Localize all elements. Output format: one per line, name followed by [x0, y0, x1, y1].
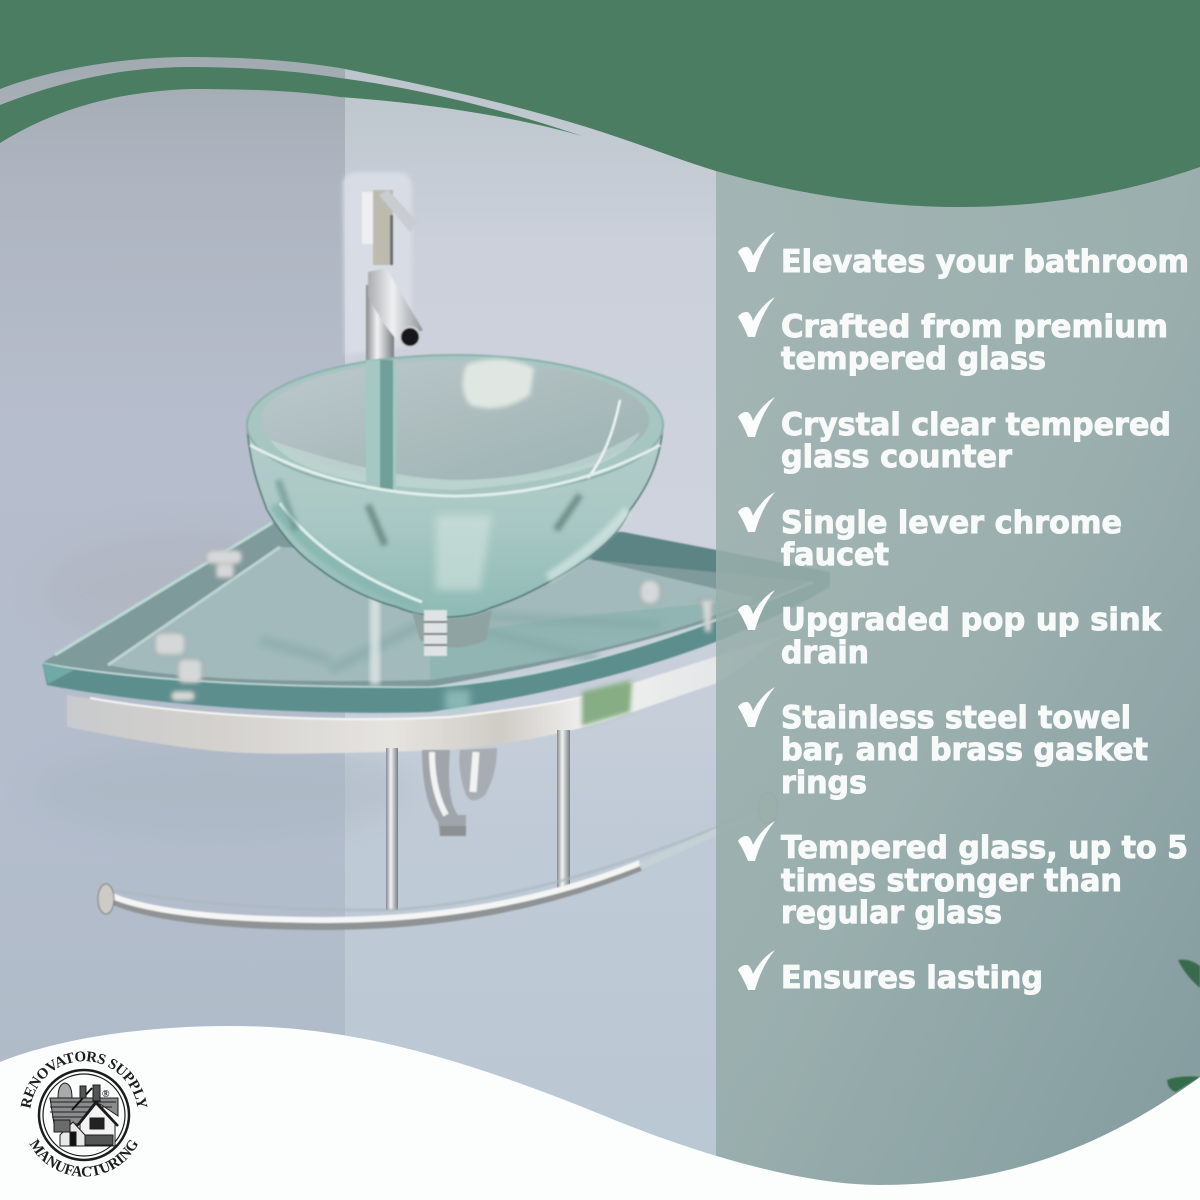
check	[738, 232, 775, 272]
check	[738, 821, 775, 861]
right wall	[345, 0, 1200, 1200]
text: times stronger than	[781, 863, 1122, 899]
text: Elevates your bathroom	[781, 244, 1189, 280]
drain trap	[422, 748, 497, 836]
feature: faucet	[738, 492, 1122, 573]
standoff pins	[155, 550, 717, 701]
towel bar	[98, 793, 780, 925]
logo house	[50, 1083, 118, 1146]
shelf top back band	[42, 523, 830, 687]
text: glass counter	[781, 439, 1013, 475]
feature: elevates	[738, 232, 1189, 280]
text: Crafted from premium	[781, 309, 1168, 345]
registered mark: ®	[102, 1089, 110, 1100]
green wave	[0, 0, 1200, 207]
feature list	[738, 232, 1189, 996]
text: Tempered glass, up to 5	[781, 830, 1188, 866]
text: Crystal clear tempered	[781, 407, 1171, 443]
check	[738, 397, 775, 437]
text: bar, and brass gasket	[781, 732, 1148, 768]
shelf inner surface	[108, 547, 755, 681]
text: Single lever chrome	[781, 505, 1122, 541]
plant leaves	[1167, 960, 1200, 1092]
wall plate	[343, 172, 412, 355]
check	[738, 590, 775, 630]
green swoosh sliver	[0, 67, 582, 143]
logo text bottom: MANUFACTURING	[29, 1138, 138, 1177]
counter shelf glass	[42, 523, 830, 713]
text: Upgraded pop up sink	[781, 602, 1162, 638]
text: Stainless steel towel	[781, 700, 1131, 736]
check	[738, 297, 775, 337]
top green wave with swoosh	[0, 0, 1200, 207]
faucet	[362, 190, 423, 363]
chrome support band	[67, 633, 790, 754]
bottom white wave	[0, 1026, 1200, 1200]
logo: Renovators Supply Manufacturing	[20, 1051, 148, 1177]
drain fitting	[412, 610, 492, 656]
feature: lasting	[738, 950, 1043, 996]
feature: towel bar	[738, 687, 1148, 801]
text: tempered glass	[781, 341, 1046, 377]
left wall	[0, 0, 345, 1200]
feature: crafted	[738, 297, 1168, 377]
feature: crystal	[738, 397, 1171, 475]
text: rings	[781, 765, 867, 801]
text: faucet	[781, 537, 889, 573]
check	[738, 687, 775, 727]
check	[738, 492, 775, 532]
support rods	[386, 730, 570, 910]
feature: strength	[738, 821, 1188, 931]
text: regular glass	[781, 895, 1002, 931]
sink shadow	[40, 530, 340, 650]
feature: drain	[738, 590, 1162, 671]
text: Ensures lasting	[781, 960, 1043, 996]
translucent features panel	[716, 150, 1200, 1200]
vessel bowl	[247, 355, 663, 617]
check	[738, 950, 775, 990]
logo text top: RENOVATORS SUPPLY	[20, 1051, 148, 1109]
text: drain	[781, 635, 869, 671]
logo ring	[39, 1070, 129, 1160]
shelf front edge	[42, 572, 830, 713]
